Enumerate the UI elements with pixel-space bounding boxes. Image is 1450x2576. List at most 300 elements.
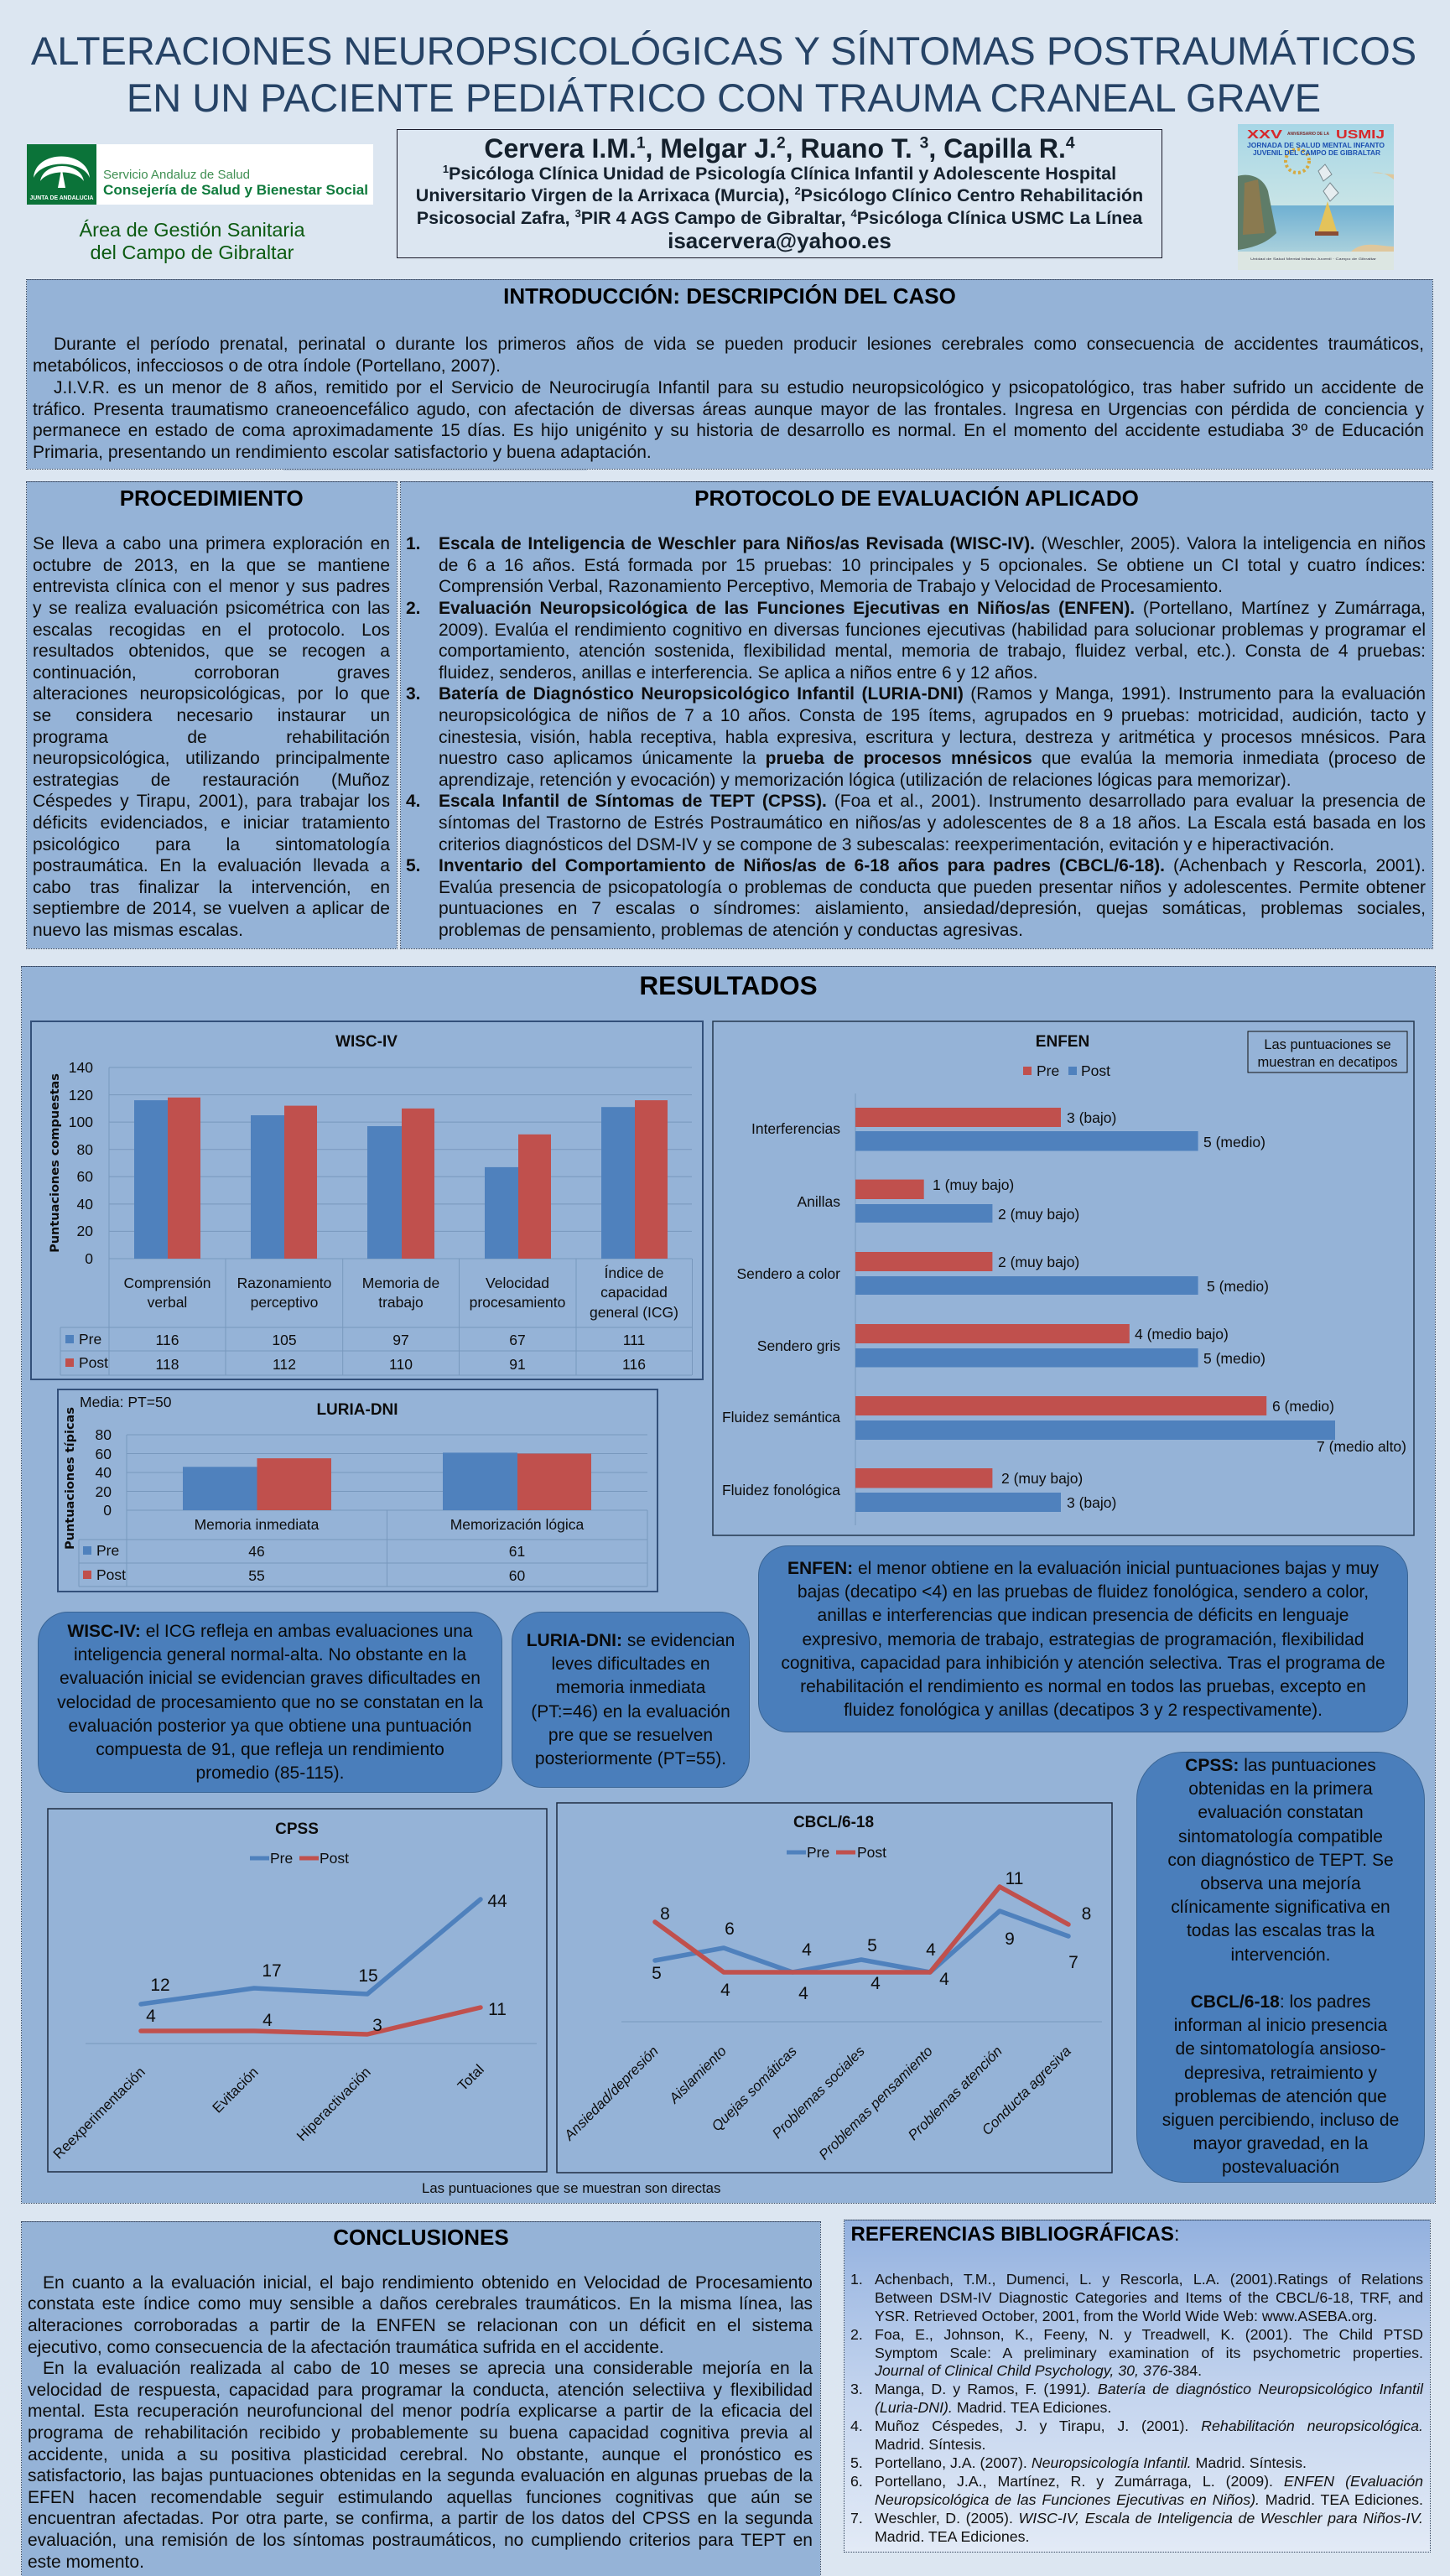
text block: mental. Esta recuperación neurofuncional del menor podría explicarse a partir de la eficacia del: [28, 2402, 813, 2421]
congress poster image: ANIVERSARIO DE LA: [1287, 132, 1329, 137]
numbered list: Evaluación Neuropsicológica de las Funciones Ejecutivas en Niños/as (ENFEN). (Portellano, Martínez y Zumárraga,: [439, 599, 1426, 618]
data table: 111: [623, 1332, 645, 1348]
text block: encuentran afectadas. Por otra parte, se confirma, a partir de los datos del CPSS en la segunda: [28, 2509, 813, 2528]
callout: ENFEN: rehabilitación el rendimiento es normal en todos las pruebas, excepto en: [800, 1677, 1366, 1696]
text block: J.I.V.R. es un menor de 8 años, remitido por el Servicio de Neurocirugía Infantil para su estudio neuropsicológico y psicopatológico, tras haber sufrido un accidente de: [54, 378, 1424, 397]
congress poster image: XXV: [1247, 127, 1282, 142]
category labels: Razonamiento: [237, 1275, 331, 1291]
bars: Pre: [134, 1100, 635, 1259]
text block: metabólicos, infecciosos o de otra índole (Portellano, 2007).: [33, 356, 501, 376]
numbered list: [406, 534, 1426, 940]
text block: satisfactorio, las bajas puntuaciones obtenidas en la segunda evaluación en algunas pruebas de la: [28, 2466, 813, 2485]
text block: EFEN hacen recomendable seguir estimulando aquellas funciones cognitivas que aún se: [28, 2488, 813, 2507]
heading: CONCLUSIONES: [333, 2225, 509, 2250]
data labels: 5: [652, 1964, 662, 1983]
area label: [79, 219, 305, 263]
logo: Servicio Andaluz de Salud: JUNTA DE ANDALUCIA: [30, 194, 94, 201]
category labels: Problemas sociales: [769, 2043, 868, 2142]
bars: Post: [855, 1131, 1335, 1512]
y axis: 40: [77, 1196, 93, 1213]
data labels: 9: [1005, 1929, 1015, 1949]
callout: LURIA-DNI: (PT:=46) en la evaluación: [531, 1702, 730, 1722]
value labels: 2 (muy bajo): [998, 1254, 1079, 1270]
category labels: Problemas atención: [905, 2043, 1006, 2143]
text block: septiembre de 2014, se vuelven a aplicar de: [33, 899, 390, 918]
category labels: Hiperactivación: [294, 2064, 374, 2144]
note: Las puntuaciones se: [1264, 1037, 1391, 1052]
panel: referencias: 2.: [850, 2326, 863, 2343]
data labels: 12: [150, 1976, 170, 1995]
callout: CPSS and CBCL: sintomatología compatible: [1178, 1827, 1383, 1846]
line: Pre: [141, 1899, 481, 2004]
panel: referencias: 7.: [850, 2510, 863, 2527]
reference list: [850, 2271, 1424, 2545]
callout: LURIA-DNI: [512, 1612, 750, 1788]
category labels: [123, 1265, 678, 1321]
category labels: Evitación: [210, 2064, 262, 2116]
panel: referencias: 1.: [850, 2271, 863, 2288]
value labels: 2 (muy bajo): [998, 1206, 1079, 1223]
y axis: 80: [77, 1141, 93, 1158]
data table: Post: [96, 1566, 126, 1583]
category labels: capacidad: [600, 1284, 668, 1301]
text block: [33, 335, 1424, 462]
congress poster image: JUVENIL DEL CAMPO DE GIBRALTAR: [1253, 149, 1380, 157]
data labels: 6: [725, 1919, 735, 1939]
callout: LURIA-DNI: posteriormente (PT=55).: [535, 1749, 726, 1768]
reference list: (Luria-DNI). Madrid. TEA Ediciones.: [875, 2399, 1111, 2416]
congress poster image: USMIJ: [1336, 127, 1385, 142]
y axis: 120: [69, 1087, 93, 1104]
note: muestran en decatipos: [1258, 1055, 1397, 1070]
text block: déficits evidenciados, e iniciar tratamiento: [33, 813, 390, 833]
callout: CPSS and CBCL: informan al inicio presencia: [1174, 2016, 1387, 2035]
reference list: Symptom Scale: A preliminary examination of its psychometric properties.: [875, 2345, 1423, 2361]
data labels: 15: [358, 1966, 378, 1986]
y axis: 20: [96, 1483, 112, 1500]
value labels: 4 (medio bajo): [1135, 1326, 1229, 1343]
affiliations: [416, 163, 1143, 228]
text block: velocidad de respuesta, capacidad para programar la conducta, atención selectiiva y flexibilidad: [28, 2381, 813, 2400]
value labels: 5 (medio): [1207, 1278, 1269, 1295]
callout: CPSS and CBCL: postevaluación: [1222, 2158, 1339, 2177]
text block: [33, 534, 391, 940]
numbered list: puntuaciones en 7 escalas o síndromes: aislamiento, ansiedad/depresión, quejas somáticas, problemas sociales,: [439, 899, 1426, 918]
data labels: 4: [146, 2007, 156, 2026]
text block: nuevo las mismas escalas.: [33, 921, 243, 940]
category labels: Problemas pensamiento: [816, 2043, 936, 2163]
text block: tráfico. Presenta traumatismo craneoencefálico agudo, con afectación de diversas áreas aunque mayor de las frontales. Ingresa en Urgencias con pérdida de conciencia y: [33, 400, 1424, 419]
data table: Memoria inmediata: [195, 1516, 320, 1533]
text block: estrategias de restauración (Muñoz: [33, 771, 390, 790]
text block: alteraciones corroboradas a partir de la ENFEN se relacionan con un déficit en el sistema: [28, 2316, 813, 2335]
category labels: Fluidez semántica: [722, 1409, 840, 1426]
numbered list: 2009). Evalúa el rendimiento cognitivo en diversas funciones ejecutivas (habilidad para solucionar problemas y programar el: [439, 621, 1426, 640]
data table: Memorización lógica: [450, 1516, 585, 1533]
callout: ENFEN: [758, 1545, 1408, 1732]
y axis: 60: [77, 1168, 93, 1185]
data labels: 4: [926, 1940, 936, 1960]
chart: CBCL/6-18: [557, 1803, 1112, 2173]
congress poster image: Unidad de Salud Mental Infanto Juvenil · Campo de Gibraltar: [1250, 257, 1377, 261]
callout: CPSS and CBCL: con diagnóstico de TEPT. Se: [1167, 1851, 1394, 1870]
congress poster image: [1238, 124, 1394, 270]
category labels: Total: [455, 2061, 487, 2094]
text block: neuropsicológica, utilizando principalmente: [33, 749, 390, 768]
panel: introducción: [27, 280, 1432, 469]
category labels: perceptivo: [251, 1294, 318, 1311]
data table: Pre: [96, 1542, 119, 1559]
y axis: 60: [96, 1446, 112, 1462]
callout: WISC-IV: velocidad de procesamiento que no se constatan en la: [57, 1693, 483, 1712]
data labels: 4: [939, 1970, 949, 1989]
category labels: [722, 1120, 840, 1498]
callout: CPSS and CBCL: obtenidas en la primera: [1188, 1779, 1373, 1799]
heading: INTRODUCCIÓN: DESCRIPCIÓN DEL CASO: [503, 283, 956, 309]
text block: evaluación, una remisión de los síntomas postraumáticos, no cumpliendo criterios para TEPT en: [28, 2531, 813, 2550]
chart: CPSS: CPSS: [275, 1820, 319, 1838]
value labels: 6 (medio): [1272, 1398, 1334, 1415]
affiliations: Universitario Virgen de la Arrixaca (Murcia), 2Psicólogo Clínico Centro Rehabilitación: [416, 184, 1143, 205]
chart: WISC-IV: WISC-IV: [335, 1033, 398, 1051]
panel: protocolo de evaluación: [401, 482, 1432, 948]
authors box: [397, 129, 1162, 258]
category labels: Comprensión: [123, 1275, 211, 1291]
data table: 110: [389, 1356, 413, 1373]
numbered list: criterios diagnósticos del DSM-IV y se compone de 3 subescalas: reexperimentación, evitación y e hiperactivación.: [439, 835, 1334, 854]
reference list: YSR. Retrieved October, 2001, from the World Wide Web: www.ASEBA.org.: [875, 2308, 1377, 2324]
category labels: [560, 2043, 1074, 2163]
data table: 61: [509, 1543, 525, 1560]
value labels: 1 (muy bajo): [933, 1176, 1014, 1193]
category labels: Anillas: [797, 1193, 840, 1210]
text block: alteraciones neuropsicológicas, por lo que: [33, 684, 390, 704]
category labels: Conducta agresiva: [979, 2043, 1074, 2138]
data table: Post: [79, 1354, 108, 1371]
panel: protocolo de evaluación: 4.: [406, 792, 421, 811]
data table: 60: [509, 1567, 525, 1584]
panel: referencias: 3.: [850, 2381, 863, 2397]
text block: En la evaluación realizada al cabo de 10 meses se aprecia una considerable mejoría en la: [43, 2359, 813, 2378]
legend: Post: [857, 1844, 886, 1861]
text block: programa de rehabilitación: [33, 728, 390, 747]
chart: ENFEN: [713, 1021, 1414, 1535]
reference list: Weschler, D. (2005). WISC-IV, Escala de Inteligencia de Weschler para Niños-IV.: [875, 2510, 1423, 2527]
area label: Área de Gestión Sanitaria: [79, 219, 305, 241]
y axis: 40: [96, 1464, 112, 1481]
legend: Pre: [1037, 1062, 1059, 1079]
reference list: Achenbach, T.M., Dumenci, L. y Rescorla, L.A. (2001).Ratings of Relations: [875, 2271, 1423, 2288]
panel: referencias: 4.: [850, 2418, 863, 2434]
data labels: 4: [720, 1981, 730, 2000]
text block: octubre de 2013, en la que se mantiene: [33, 556, 390, 575]
category labels: Velocidad: [486, 1275, 549, 1291]
text block: programa de rehabilitación recibido y probablemente su buena capacidad cognitiva previa al: [28, 2423, 813, 2443]
panel: referencias: [845, 2220, 1430, 2552]
callout: LURIA-DNI: pre que se resuelven: [548, 1726, 713, 1745]
callout: CPSS and CBCL: mayor gravedad, en la: [1193, 2134, 1368, 2153]
logo: Servicio Andaluz de Salud: Consejería de Salud y Bienestar Social: [103, 182, 368, 198]
panel: protocolo de evaluación: 5.: [406, 856, 421, 875]
y axis: 0: [103, 1502, 112, 1519]
callout: CPSS and CBCL: observa una mejoría: [1200, 1874, 1361, 1893]
numbered list: Escala de Inteligencia de Weschler para Niños/as Revisada (WISC-IV). (Weschler, 2005). Valora la inteligencia en niños: [439, 534, 1426, 553]
line: Pre: [655, 1911, 1068, 1972]
heading: REFERENCIAS BIBLIOGRÁFICAS:: [850, 2223, 1180, 2246]
panel: protocolo de evaluación: 3.: [406, 684, 421, 704]
reference list: Foa, E., Johnson, K., Feeny, N. y Treadwell, K. (2001). The Child PTSD: [875, 2326, 1423, 2343]
y axis: 0: [85, 1250, 93, 1267]
panel: referencias: 6.: [850, 2473, 863, 2490]
data labels: 17: [262, 1961, 282, 1981]
y axis: 140: [69, 1059, 93, 1076]
numbered list: Escala Infantil de Síntomas de TEPT (CPSS). (Foa et al., 2001). Instrumento desarrollado para evaluar la presencia de: [439, 792, 1426, 811]
callout: CPSS and CBCL: CPSS: las puntuaciones: [1185, 1756, 1376, 1775]
callout: ENFEN: cognitiva, capacidad para inhibición y atención selectiva. Tras el programa de: [781, 1654, 1385, 1673]
numbered list: nuestro caso aplicamos únicamente la prueba de procesos mnésicos que evalúa la memoria inmediata (proceso de: [439, 749, 1426, 768]
category labels: Interferencias: [751, 1120, 840, 1137]
callout: CPSS and CBCL: siguen percibiendo, incluso de: [1162, 2111, 1399, 2130]
y axis title: Puntuaciones compuestas: [49, 1073, 62, 1253]
y axis: 100: [69, 1114, 93, 1130]
value labels: 5 (medio): [1203, 1134, 1266, 1150]
chart: CPSS: [48, 1809, 547, 2172]
numbered list: Evalúa presencia de psicopatología o problemas de conducta que pueden presentar niños y adolescentes. Permite obtener: [439, 878, 1426, 897]
data table: [65, 1331, 646, 1373]
data labels: 4: [802, 1940, 812, 1960]
callout: CPSS and CBCL: [1136, 1752, 1425, 2183]
category labels: Memoria de: [362, 1275, 439, 1291]
numbered list: de 6 a 16 años. Está formada por 15 pruebas: 10 principales y 5 opcionales. Se obtiene un CI total y cuatro índices:: [439, 556, 1426, 575]
reference list: Neuropsicológica de las Funciones Ejecutivas en Niños). Madrid. TEA Ediciones.: [875, 2491, 1423, 2508]
heading: PROTOCOLO DE EVALUACIÓN APLICADO: [694, 486, 1139, 511]
reference list: Between DSM-IV Diagnostic Categories and Items of the CBCL/6-18, TRF, and: [875, 2289, 1423, 2306]
numbered list: Batería de Diagnóstico Neuropsicológico Infantil (LURIA-DNI) (Ramos y Manga, 1991). Instrumento para la evaluación: [439, 684, 1426, 704]
text block: este momento.: [28, 2553, 144, 2572]
chart: WISC-IV: [31, 1021, 703, 1379]
callout: WISC-IV: WISC-IV: el ICG refleja en ambas evaluaciones una: [67, 1622, 473, 1641]
numbered list: cinestesia, visión, habla receptiva, habla expresiva, escritura y lectura, destreza y aritmética y procesos mnésicos. Para: [439, 728, 1426, 747]
congress poster image: JORNADA DE SALUD MENTAL INFANTO: [1247, 142, 1385, 149]
logo: Servicio Andaluz de Salud: [27, 144, 373, 205]
value labels: 2 (muy bajo): [1001, 1470, 1083, 1487]
numbered list: neuropsicológica de niños de 7 a 10 años. Consta de 195 ítems, agrupados en 9 pruebas: motricidad, audición, tacto y: [439, 706, 1426, 725]
legend: Pre: [270, 1850, 293, 1867]
data table: 97: [392, 1332, 409, 1348]
category labels: Sendero gris: [757, 1337, 840, 1354]
legend: Pre: [807, 1844, 829, 1861]
chart: CBCL/6-18: CBCL/6-18: [793, 1814, 874, 1831]
data labels: 11: [488, 2000, 507, 2019]
text block: En cuanto a la evaluación inicial, el bajo rendimiento obtenido en Velocidad de Procesamiento: [43, 2273, 813, 2293]
chart: LURIA-DNI: Media: PT=50: [80, 1394, 172, 1410]
line: Post: [655, 1887, 1068, 1972]
callout: ENFEN: ENFEN: el menor obtiene en la evaluación inicial puntuaciones bajas y muy: [787, 1559, 1379, 1578]
panel: protocolo de evaluación: 2.: [406, 599, 421, 618]
category labels: Índice de: [604, 1265, 664, 1281]
category labels: Reexperimentación: [50, 2064, 148, 2162]
data labels: 4: [798, 1984, 808, 2003]
legend: Post: [320, 1850, 349, 1867]
text block: y se realiza evaluación psicométrica con las: [33, 599, 390, 618]
bars: Post: [168, 1098, 668, 1259]
bars: [183, 1452, 591, 1510]
data labels: 3: [372, 2016, 382, 2035]
text block: permanece en estado de coma aproximadamente 15 días. Es hijo unigénito y su historia de desarrollo es normal. En el momento del accidente estudiaba 3º de Educación: [33, 421, 1424, 440]
data labels: 44: [487, 1892, 507, 1911]
chart: ENFEN: ENFEN: [1036, 1033, 1089, 1051]
callout: LURIA-DNI: leves dificultades en: [551, 1654, 710, 1674]
data table: 91: [509, 1356, 526, 1373]
y axis: 20: [77, 1223, 93, 1239]
area label: del Campo de Gibraltar: [91, 242, 294, 263]
data labels: [146, 1892, 507, 2035]
callout: CPSS and CBCL: intervención.: [1230, 1945, 1331, 1965]
panel: protocolo de evaluación: 1.: [406, 534, 421, 553]
panel: conclusiones: [22, 2222, 820, 2576]
data labels: 8: [660, 1904, 670, 1924]
panel: referencias: 5.: [850, 2454, 863, 2471]
callout: CPSS and CBCL: CBCL/6-18: los padres: [1191, 1992, 1370, 2012]
callout: CPSS and CBCL: evaluación constatan: [1198, 1803, 1364, 1822]
callout: CPSS and CBCL: todas las escalas tras la: [1187, 1921, 1375, 1940]
data table: 116: [156, 1332, 179, 1348]
data table: 46: [248, 1543, 265, 1560]
data table: [83, 1516, 585, 1584]
text block: Se lleva a cabo una primera exploración en: [33, 534, 390, 553]
category labels: Sendero a color: [736, 1265, 840, 1282]
logo: Servicio Andaluz de Salud: Servicio Andaluz de Salud: [103, 168, 250, 182]
panel: procedimiento: [27, 482, 396, 948]
callout: ENFEN: fluidez fonológica y anillas (decatipos 3 y 2 respectivamente).: [844, 1701, 1323, 1720]
numbered list: comportamiento, atención sostenida, flexibilidad mental, memoria de trabajo, fluidez verbal, etc.). Consta de 4 pruebas:: [439, 641, 1426, 661]
legend: [787, 1844, 886, 1861]
text block: postraumática. En la evaluación llevada a: [33, 856, 390, 875]
affiliations: Psicosocial Zafra, 3PIR 4 AGS Campo de Gibraltar, 4Psicóloga Clínica USMC La Línea: [417, 207, 1142, 228]
data table: Pre: [79, 1331, 101, 1348]
chart: LURIA-DNI: [58, 1389, 657, 1592]
value labels: 3 (bajo): [1067, 1494, 1116, 1511]
callout: WISC-IV: promedio (85-115).: [195, 1763, 345, 1783]
text block: escalas recogidas en el protocolo. Los: [33, 621, 390, 640]
email: isacervera@yahoo.es: [668, 228, 891, 253]
text block: psicológico para la sintomatología: [33, 835, 390, 854]
callout: CPSS and CBCL: depresiva, retraimiento y: [1184, 2064, 1377, 2083]
category labels: verbal: [148, 1294, 187, 1311]
text block: accidente, unida a su positiva plasticidad cerebral. No obstante, aunque el pronóstico es: [28, 2445, 813, 2464]
data table: 67: [509, 1332, 526, 1348]
category labels: Quejas somáticas: [709, 2043, 800, 2134]
value labels: [933, 1109, 1406, 1511]
callout: CPSS and CBCL: problemas de atención que: [1174, 2087, 1387, 2106]
chart: LURIA-DNI: LURIA-DNI: [316, 1401, 398, 1419]
text block: Céspedes y Tirapu, 2001), para trabajar los: [33, 792, 390, 811]
data labels: 4: [871, 1974, 881, 1993]
text block: constata este índice como muy sensible a daños cerebrales traumáticos. En la misma línea, las: [28, 2294, 813, 2314]
callout: ENFEN: expresivo, memoria de trabajo, estrategias de programación, flexibilidad: [802, 1630, 1364, 1649]
numbered list: Comprensión Verbal, Razonamiento Perceptivo, Memoria de Trabajo y Velocidad de Procesamiento.: [439, 577, 1223, 596]
numbered list: problemas de pensamiento, problemas de atención y conductas agresivas.: [439, 921, 1023, 940]
y axis: [69, 1059, 93, 1267]
reference list: Muñoz Céspedes, J. y Tirapu, J. (2001). Rehabilitación neuropsicológica.: [875, 2418, 1423, 2434]
numbered list: síntomas del Trastorno de Estrés Postraumático en niños/as y adolescentes de 8 a 18 años. La Escala está basada en los: [439, 813, 1426, 833]
callout: WISC-IV: evaluación inicial se evidencian graves dificultades en: [60, 1669, 481, 1688]
data labels: 11: [1006, 1869, 1023, 1888]
callout: CPSS and CBCL: de sintomatología ansioso-: [1176, 2039, 1385, 2059]
value labels: 7 (medio alto): [1317, 1438, 1406, 1455]
text block: Primaria, presentando un rendimiento escolar satisfactorio y buena adaptación.: [33, 443, 652, 462]
callout: WISC-IV: compuesta de 91, que refleja un rendimiento: [96, 1740, 444, 1759]
reference list: Portellano, J.A., Martínez, R. y Zumárraga, L. (2009). ENFEN (Evaluación: [875, 2473, 1423, 2490]
text block: cabo tras finalizar la intervención, en: [33, 878, 390, 897]
category labels: Aislamiento: [666, 2043, 730, 2107]
legend: Post: [1081, 1062, 1110, 1079]
reference list: Portellano, J.A. (2007). Neuropsicología Infantil. Madrid. Síntesis.: [875, 2454, 1307, 2471]
category labels: trabajo: [378, 1294, 424, 1311]
affiliations: 1Psicóloga Clínica Unidad de Psicología Clínica Infantil y Adolescente Hospital: [443, 163, 1116, 184]
text block: entrevista clínica con el menor y sus padres: [33, 577, 390, 596]
callout: WISC-IV: evaluación posterior ya que obtiene una puntuación: [68, 1716, 472, 1736]
data table: 118: [156, 1356, 179, 1373]
data table: 105: [272, 1332, 297, 1348]
title: ALTERACIONES NEUROPSICOLÓGICAS Y SÍNTOMAS POSTRAUMÁTICOS: [31, 29, 1416, 73]
heading: PROCEDIMIENTO: [120, 486, 304, 511]
y axis: [96, 1426, 112, 1519]
line: Post: [141, 2007, 481, 2034]
data labels: [652, 1869, 1091, 2003]
legend: [1023, 1062, 1110, 1079]
title: [31, 29, 1416, 120]
callout: CPSS and CBCL: clínicamente significativa en: [1171, 1898, 1390, 1917]
category labels: [50, 2061, 487, 2162]
y axis title: Puntuaciones típicas: [64, 1407, 77, 1550]
reference list: Manga, D. y Ramos, F. (1991). Batería de diagnóstico Neuropsicológico Infantil: [875, 2381, 1423, 2397]
callout: WISC-IV: inteligencia general normal-alta. No obstante en la: [74, 1645, 466, 1665]
text block: se considera necesario instaurar un: [33, 706, 390, 725]
reference list: Madrid. Síntesis.: [875, 2436, 985, 2453]
reference list: Journal of Clinical Child Psychology, 30, 376-384.: [875, 2362, 1202, 2379]
callout: LURIA-DNI: LURIA-DNI: se evidencian: [527, 1631, 735, 1650]
text block: resultados obtenidos, que se recogen a: [33, 641, 390, 661]
heading: RESULTADOS: [639, 970, 818, 1000]
callout: LURIA-DNI: memoria inmediata: [556, 1678, 705, 1697]
bars: Pre: [855, 1108, 1266, 1488]
data table: 55: [248, 1567, 265, 1584]
panel: resultados: [22, 967, 1435, 2203]
numbered list: fluidez, senderos, anillas e interferencia. Se aplica a niños entre 6 y 12 años.: [439, 663, 1037, 683]
authors: Cervera I.M.1, Melgar J.2, Ruano T. 3, Capilla R.4: [484, 132, 1075, 163]
callout: ENFEN: bajas (decatipo <4) en las pruebas de fluidez fonológica, sendero a color,: [798, 1582, 1369, 1602]
numbered list: aprendizaje, retención y evocación) y memorización lógica (utilización de relaciones lógicas para memorizar).: [439, 771, 1291, 790]
text block: Durante el período prenatal, perinatal o durante los primeros años de vida se pueden producir lesiones cerebrales como consecuencia de accidentes traumáticos,: [54, 335, 1424, 354]
data labels: 8: [1082, 1904, 1091, 1924]
y axis: 80: [96, 1426, 112, 1443]
data labels: 4: [262, 2011, 273, 2030]
category labels: Ansiedad/depresión: [560, 2043, 662, 2144]
value labels: 5 (medio): [1203, 1350, 1266, 1367]
data table: 112: [273, 1356, 296, 1373]
callout: WISC-IV: [38, 1612, 502, 1793]
category labels: procesamiento: [470, 1294, 565, 1311]
text block: [28, 2273, 813, 2572]
text block: continuación, corroboran graves: [33, 663, 390, 683]
category labels: Fluidez fonológica: [722, 1482, 840, 1498]
reference list: Madrid. TEA Ediciones.: [875, 2528, 1030, 2545]
note: direct scores: Las puntuaciones que se muestran son directas: [422, 2180, 720, 2196]
value labels: 3 (bajo): [1067, 1109, 1116, 1126]
data labels: 7: [1068, 1953, 1078, 1972]
data labels: 5: [867, 1936, 877, 1955]
